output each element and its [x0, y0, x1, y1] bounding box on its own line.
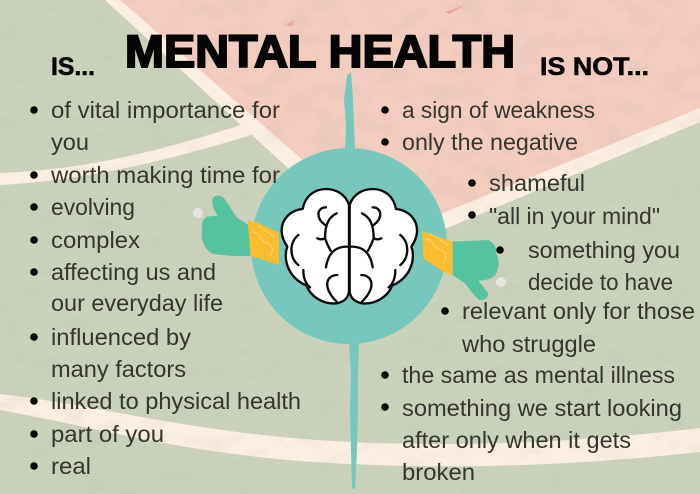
- list: mental health is: many factors: [51, 356, 186, 382]
- right hemisphere: [350, 189, 417, 303]
- list: mental health is: of vital importance for: [51, 97, 280, 123]
- list: mental health is: part of you: [51, 421, 164, 447]
- list: mental health is: real: [51, 453, 91, 479]
- list: mental health is: evolving: [51, 194, 135, 220]
- heading: is not: IS NOT...: [540, 53, 649, 81]
- left hemisphere: [282, 189, 349, 303]
- list: mental health is not: only the negative: [402, 129, 578, 155]
- list: mental health is not: who struggle: [461, 331, 596, 357]
- title: MENTAL HEALTH: [125, 26, 515, 77]
- list: mental health is: influenced by: [51, 324, 191, 350]
- list: mental health is not: [381, 97, 695, 485]
- list: mental health is not: after only when it gets: [402, 427, 631, 453]
- list: mental health is not: shameful: [489, 170, 585, 196]
- list: mental health is: worth making time for: [50, 162, 280, 188]
- list: mental health is: [30, 97, 301, 479]
- list: mental health is not: "all in your mind": [489, 203, 660, 229]
- icon: brain: [282, 189, 417, 303]
- list: mental health is not: the same as mental illness: [402, 362, 675, 388]
- list: mental health is: you: [51, 129, 89, 155]
- heading: is: IS...: [51, 53, 95, 81]
- list: mental health is not: decide to have: [528, 269, 673, 295]
- list: mental health is: complex: [51, 227, 140, 253]
- list: mental health is not: a sign of weakness: [402, 97, 595, 123]
- list: mental health is: our everyday life: [51, 290, 223, 316]
- list: mental health is not: something we start looking: [402, 395, 682, 421]
- list: mental health is: affecting us and: [51, 259, 216, 285]
- list: mental health is not: relevant only for those: [462, 298, 695, 324]
- central teal circle with spikes: [251, 72, 447, 490]
- icon: thumb down arm: [422, 231, 499, 300]
- list: mental health is not: something you: [528, 237, 680, 263]
- list: mental health is not: broken: [402, 459, 475, 485]
- list: mental health is: linked to physical health: [51, 388, 301, 414]
- icon: thumb up arm: [202, 196, 279, 265]
